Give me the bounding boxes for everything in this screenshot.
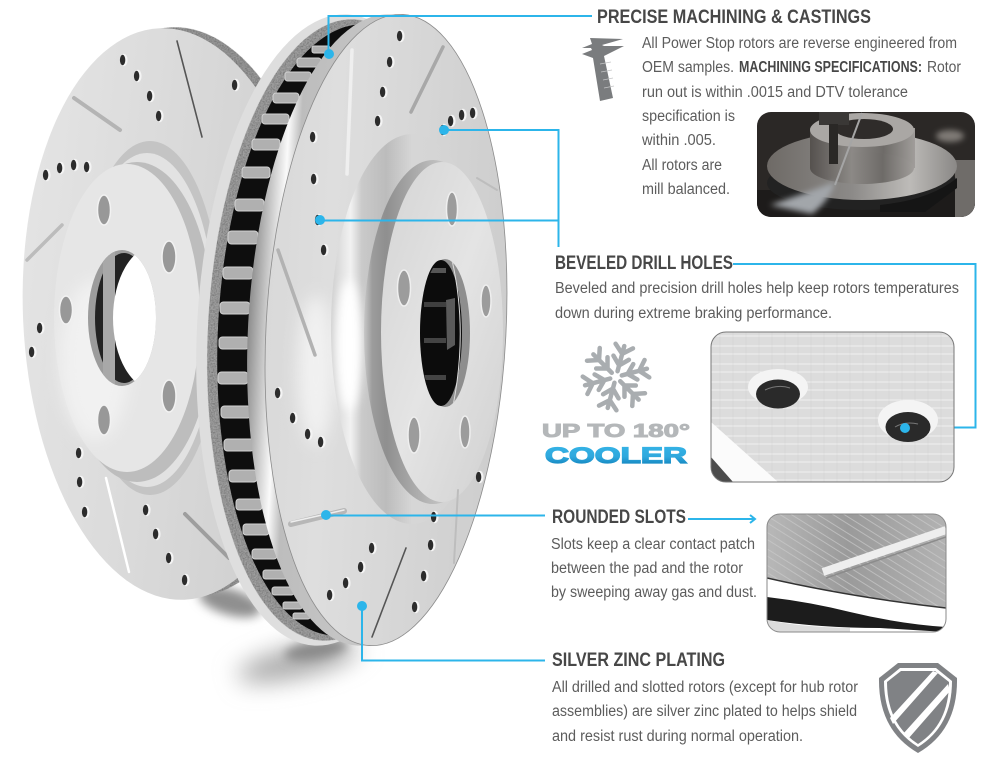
hub [331,134,503,524]
body text: zinc: and resist rust during normal operation. [552,728,803,745]
ground shadows [196,581,362,691]
stat: cooler: COOLER [545,443,687,468]
heading: drill holes: BEVELED DRILL HOLES [555,253,733,274]
body text: machining [641,35,961,198]
body text: drill holes: Beveled and precision drill holes help keep rotors temperatures [555,280,959,297]
back rotor [22,27,261,600]
panel: beveled drill holes [542,253,959,482]
cooling vanes [218,46,330,619]
stat: up to 180 degrees: UP TO 180° [542,420,690,441]
body text: machining: All rotors are [642,157,722,174]
back rotor lug holes [60,195,176,435]
leader: zinc plating [357,601,545,660]
front rotor vented band [181,7,496,653]
heading: zinc: SILVER ZINC PLATING [552,650,725,671]
panel: silver zinc plating [552,650,957,753]
icon: snowflake [577,338,655,416]
front rotor face [247,14,508,646]
body text: drill holes [555,280,959,322]
pointer dot on photo [900,423,910,433]
photo: drill holes closeup [711,332,954,482]
body text: slots: between the pad and the rotor [551,560,743,577]
body text: slots: by sweeping away gas and dust. [551,584,757,601]
body text: machining: specification is [642,108,735,125]
body text: machining: MACHINING SPECIFICATIONS: [739,59,922,76]
drill holes [275,30,484,613]
body text: machining: All Power Stop rotors are reverse engineered from [642,35,957,52]
leader: machining [324,16,592,59]
body text: zinc [552,679,858,745]
heading: machining: PRECISE MACHINING & CASTINGS [597,7,871,28]
body text: machining: OEM samples. [642,59,734,76]
body text: machining: mill balanced. [642,181,730,198]
slots [278,47,497,637]
leader: drill holes [315,125,976,428]
body text: zinc: All drilled and slotted rotors (except for hub rotor [552,679,858,696]
body text: drill holes: down during extreme braking performance. [555,305,832,322]
icon: shield [879,663,957,753]
body text: machining: Rotor [927,59,961,76]
center bore [420,259,470,407]
rotor illustration [11,7,522,691]
panel: precise machining and castings [582,7,975,217]
panel: rounded slots [551,507,946,632]
body text: machining: run out is within .0015 and DTV tolerance [642,84,908,101]
body text: slots: Slots keep a clear contact patch [551,536,755,553]
lug holes [398,192,491,453]
back rotor slots [27,41,229,572]
icon: caliper [582,38,624,101]
body text: machining: within .005. [641,132,716,149]
photo: rotor being machined [757,112,975,217]
leader: rounded slots [321,510,755,523]
heading: slots: ROUNDED SLOTS [552,507,686,528]
photo: slot closeup [767,514,946,632]
callout lines [315,16,976,660]
back rotor drill holes [29,54,240,586]
body text: slots [551,536,757,601]
body text: zinc: assemblies) are silver zinc plated to helps shield [552,703,857,720]
